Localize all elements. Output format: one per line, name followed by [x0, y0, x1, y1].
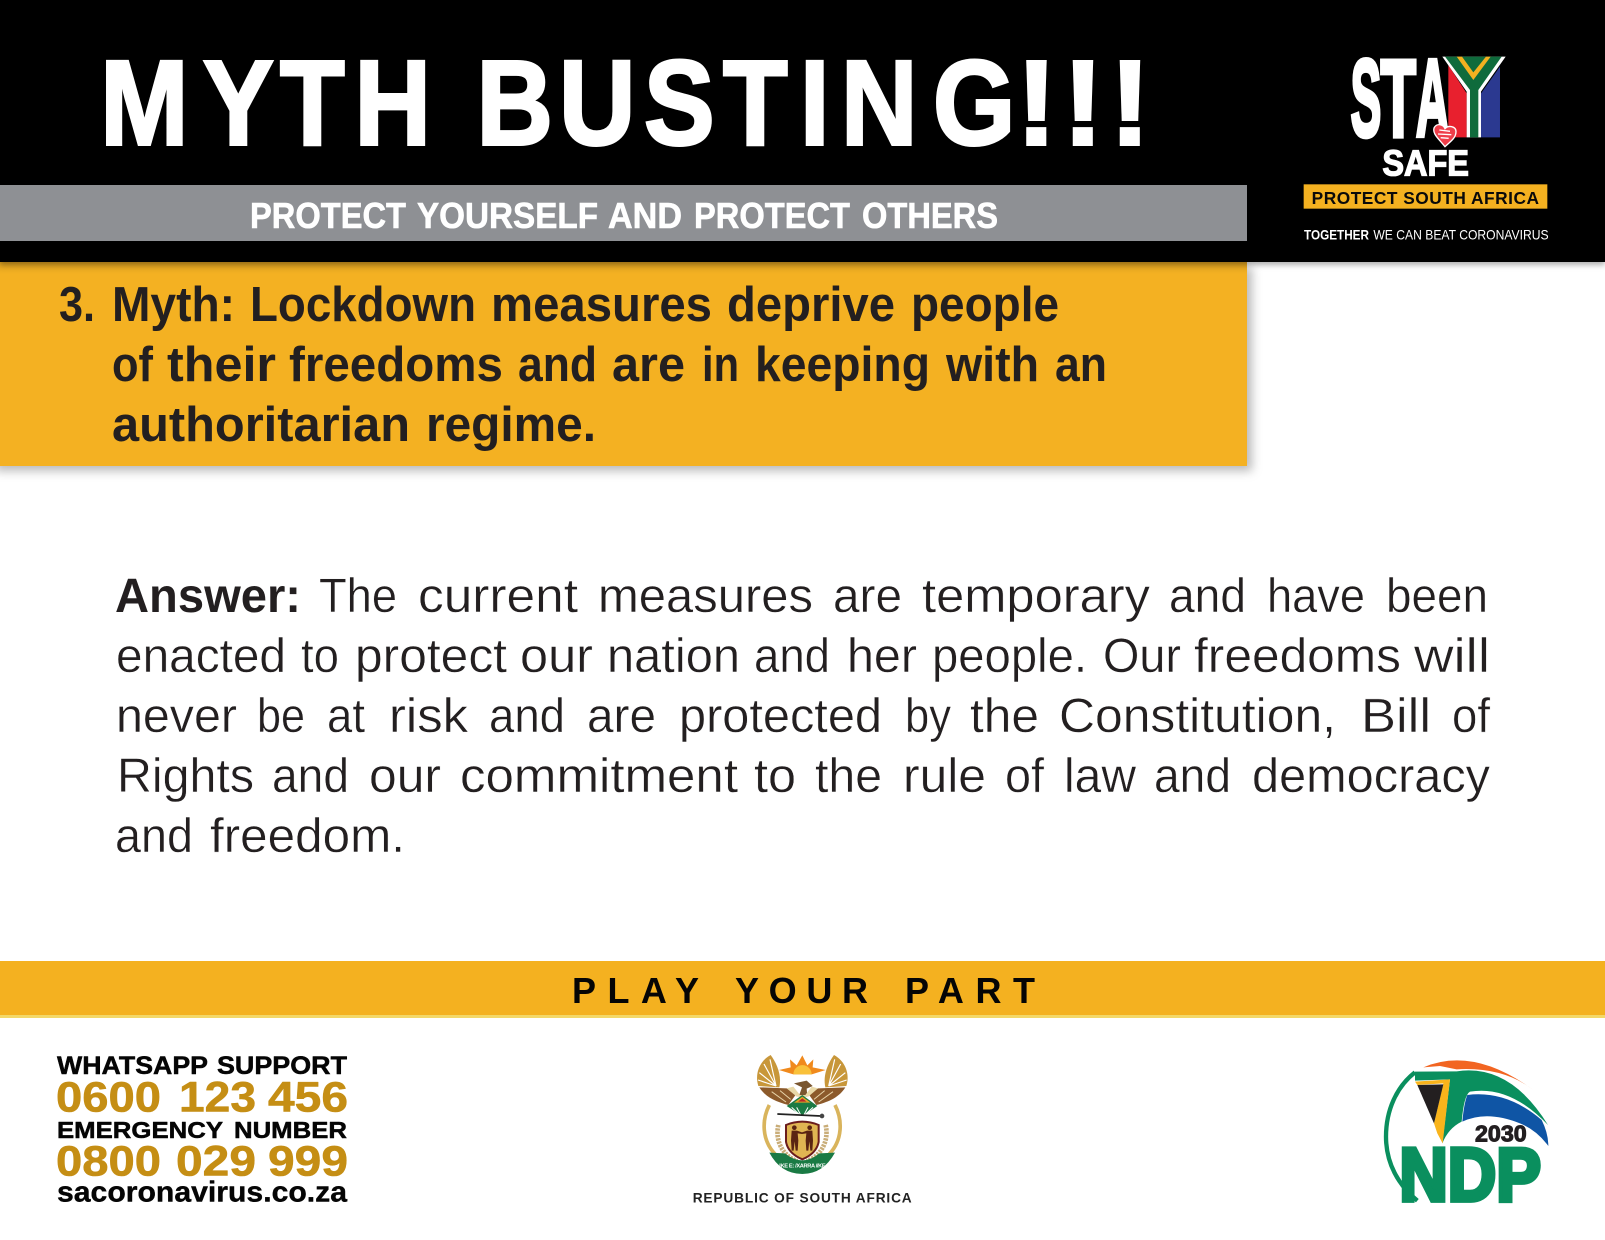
answer text: [115, 570, 1491, 863]
myth text: in: [702, 338, 739, 392]
answer text: by: [905, 690, 951, 743]
panel: subtitle bar: YOURSELF: [417, 195, 598, 236]
contact details: SUPPORT: [217, 1052, 347, 1080]
answer text: never: [116, 690, 237, 743]
logo: NDP 2030: NDP: [1399, 1133, 1541, 1217]
myth text: measures: [491, 278, 712, 332]
myth text: [59, 278, 1107, 452]
contact details: [56, 1052, 348, 1209]
tagline: WE CAN BEAT CORONAVIRUS: [1373, 226, 1549, 242]
panel: black header: [0, 0, 1605, 262]
answer text: have: [1267, 570, 1365, 623]
panel: subtitle bar: AND: [608, 195, 682, 236]
myth text: deprive: [727, 278, 895, 332]
answer text: democracy: [1252, 750, 1490, 803]
answer text: freedoms: [1194, 630, 1401, 683]
answer text: will: [1413, 630, 1490, 683]
myth text: regime.: [426, 398, 596, 452]
panel: play your part banner: YOUR: [735, 970, 868, 1011]
panel: myth statement: [0, 262, 1247, 466]
contact details: 123: [179, 1074, 256, 1122]
answer text: been: [1386, 570, 1488, 623]
answer text: to: [754, 750, 796, 803]
myth text: Lockdown: [250, 278, 476, 332]
title: !: [1063, 34, 1103, 170]
answer text: the: [970, 690, 1039, 743]
myth text: keeping: [755, 338, 930, 392]
logo: NDP 2030: 2030: [1475, 1121, 1527, 1147]
panel: play your part banner: [0, 961, 1605, 1018]
answer text: of: [1005, 750, 1045, 803]
panel: subtitle bar: OTHERS: [862, 195, 998, 236]
myth text: people: [911, 278, 1059, 332]
contact details: 029: [176, 1138, 256, 1186]
panel: subtitle bar: PROTECT: [694, 195, 850, 236]
answer text: and: [272, 750, 349, 803]
answer text: and: [754, 630, 830, 683]
answer text: to: [301, 630, 339, 683]
logo word STAY: A: [1416, 37, 1449, 160]
answer text: and: [1169, 570, 1246, 623]
answer text: freedom.: [210, 810, 405, 863]
answer text: our: [369, 750, 441, 803]
panel: play your part banner: PART: [905, 970, 1035, 1011]
answer text: law: [1064, 750, 1136, 803]
answer text: current: [418, 570, 578, 623]
label: Protect South Africa: PROTECT SOUTH AFRICA: [1312, 188, 1539, 208]
tagline: [1304, 226, 1549, 242]
answer text: rule: [903, 750, 986, 803]
answer text: our: [520, 630, 593, 683]
myth text: their: [167, 338, 276, 392]
contact details: 999: [268, 1138, 348, 1186]
contact details: 0800: [56, 1138, 161, 1186]
title: BUSTING: [477, 36, 1015, 171]
icon: coat of arms: !KE E: /XARRA //KE: [779, 1164, 826, 1170]
title: !: [1110, 34, 1150, 170]
icon: coat of arms: [757, 1055, 848, 1174]
answer text: protected: [679, 690, 882, 743]
answer text: enacted: [116, 630, 286, 683]
answer text: be: [257, 690, 305, 743]
answer text: her: [847, 630, 917, 683]
answer text: The: [319, 570, 397, 623]
icon: heart: [1434, 125, 1456, 147]
title: MYTH: [100, 36, 431, 171]
logo word STAY: T: [1381, 37, 1416, 160]
answer text: of: [1452, 690, 1491, 743]
answer text: are: [587, 690, 656, 743]
answer text: temporary: [922, 570, 1150, 623]
answer text: at: [327, 690, 365, 743]
answer text: the: [815, 750, 882, 803]
answer text: commitment: [460, 750, 738, 803]
answer text: Rights: [117, 750, 254, 803]
answer text: measures: [598, 570, 813, 623]
answer text: and: [489, 690, 565, 743]
myth text: authoritarian: [112, 398, 410, 452]
logo: NDP 2030: [1386, 1060, 1548, 1217]
myth text: freedoms: [289, 338, 503, 392]
answer text: Answer:: [115, 570, 301, 623]
contact details: NUMBER: [234, 1117, 347, 1143]
answer text: protect: [355, 630, 507, 683]
myth text: of: [112, 338, 154, 392]
contact details: WHATSAPP: [57, 1052, 208, 1080]
logo word SAFE: SAFE: [1382, 142, 1469, 183]
answer text: nation: [607, 630, 740, 683]
panel: subtitle bar: PROTECT: [250, 195, 406, 236]
tagline: TOGETHER: [1304, 226, 1369, 242]
answer text: Constitution,: [1059, 690, 1336, 743]
answer text: Our: [1103, 630, 1181, 683]
myth text: and: [518, 338, 597, 392]
answer text: Bill: [1361, 690, 1431, 743]
contact details: 456: [268, 1074, 348, 1122]
label: Republic of South Africa: REPUBLIC OF SOUTH AFRICA: [693, 1191, 912, 1206]
myth text: 3.: [59, 278, 95, 332]
answer text: risk: [389, 690, 469, 743]
panel: play your part banner: PLAY: [572, 970, 699, 1011]
answer text: and: [115, 810, 193, 863]
contact details: EMERGENCY: [57, 1117, 223, 1143]
panel: subtitle bar: [0, 185, 1247, 241]
title: [100, 34, 1150, 171]
myth text: with: [945, 338, 1039, 392]
contact details: 0600: [56, 1074, 161, 1122]
logo: Stay Safe: [1304, 37, 1549, 242]
title: !: [1016, 34, 1057, 170]
answer text: people.: [932, 630, 1087, 683]
myth text: are: [612, 338, 685, 392]
myth text: Myth:: [112, 278, 235, 332]
contact details: sacoronavirus.co.za: [57, 1177, 348, 1209]
myth text: an: [1055, 338, 1107, 392]
answer text: and: [1154, 750, 1231, 803]
logo word STAY: [1351, 37, 1506, 160]
logo word STAY: S: [1351, 37, 1381, 160]
answer text: are: [833, 570, 902, 623]
